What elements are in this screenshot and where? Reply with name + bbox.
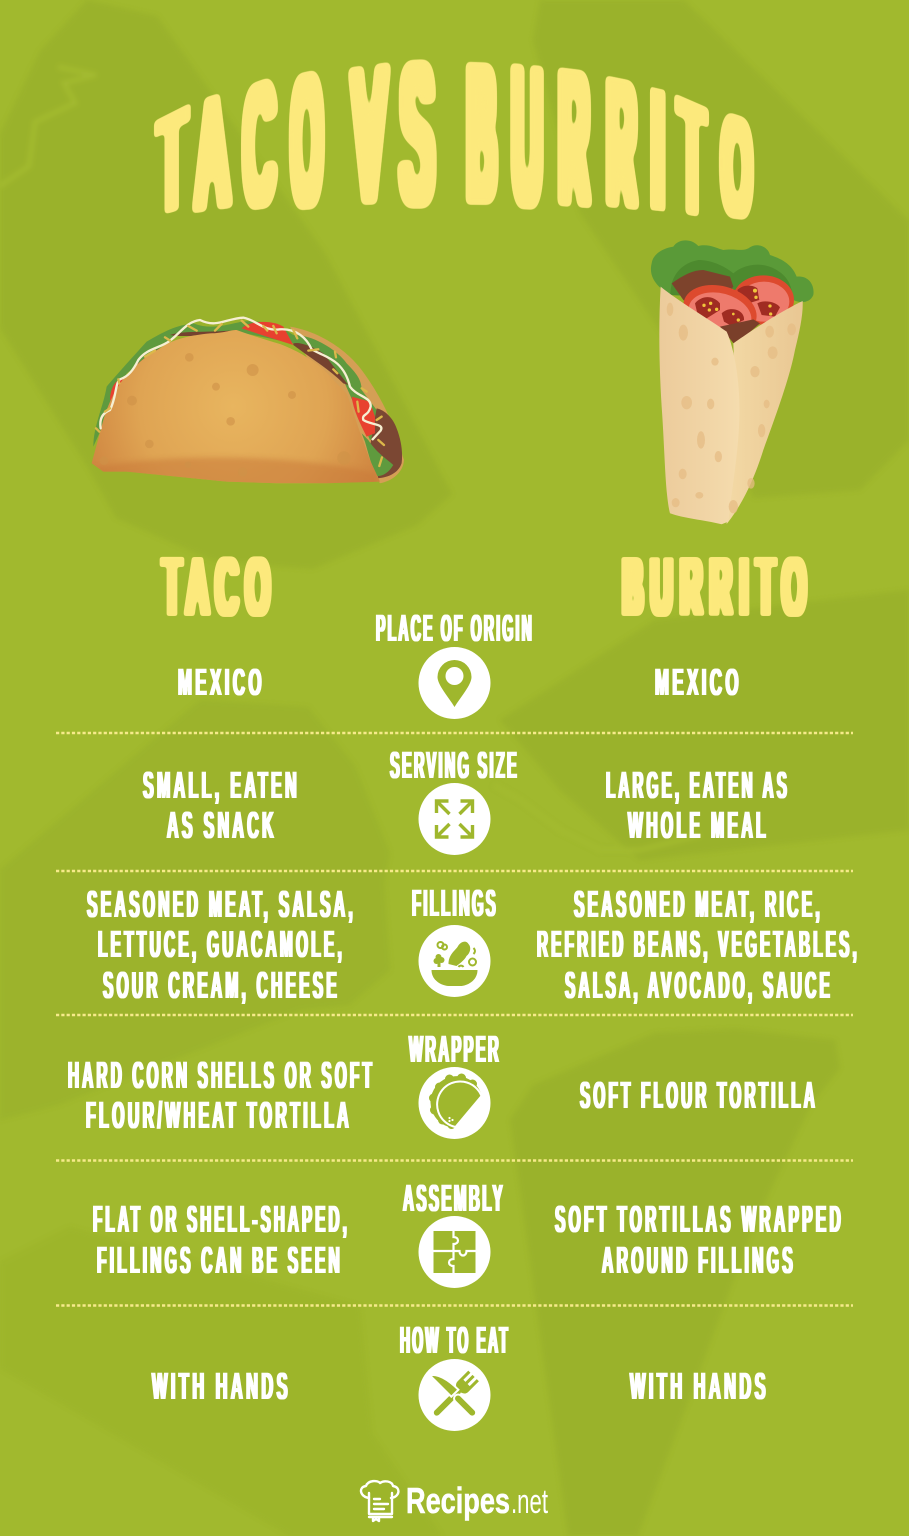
icon: taco [418, 1067, 490, 1139]
left value [87, 884, 356, 1007]
row: assembly: ASSEMBLY [403, 1178, 505, 1220]
icon: location pin [418, 647, 490, 719]
left value [143, 765, 300, 847]
title: taco vs burrito: O [730, 87, 805, 262]
row: fillings [87, 883, 860, 1007]
title: taco vs burrito: A [196, 58, 216, 239]
icon: chef hat book [361, 1481, 398, 1521]
title: taco vs burrito: T [686, 66, 762, 265]
title: taco vs burrito: B [468, 26, 499, 242]
right value [537, 884, 860, 1007]
row: how to eat: HOW TO EAT [400, 1320, 510, 1362]
row: wrapper: HARD CORN SHELLS OR SOFT [68, 1055, 375, 1097]
wordmark suffix: .net [511, 1483, 548, 1521]
text: MEXICO [655, 662, 742, 704]
title: taco vs burrito: C [242, 41, 258, 238]
title: taco vs burrito: R [560, 34, 596, 246]
row: assembly: FLAT OR SHELL-SHAPED, [93, 1199, 350, 1241]
row: place of origin: MEXICO [178, 662, 265, 704]
title: taco vs burrito [154, 25, 805, 265]
right value [555, 1199, 844, 1282]
title: taco vs burrito: T [156, 74, 172, 238]
taco illustration [90, 318, 404, 490]
row: serving size: SMALL, EATEN [143, 765, 300, 807]
row: assembly: FILLINGS CAN BE SEEN [97, 1240, 343, 1282]
title: taco vs burrito: U [513, 29, 549, 247]
row: place of origin [178, 608, 742, 719]
title: taco vs burrito: O [291, 35, 311, 241]
row: serving size [143, 745, 790, 855]
row: fillings: LETTUCE, GUACAMOLE, [98, 924, 345, 966]
icon: salad bowl [418, 925, 490, 997]
row: wrapper [68, 1029, 818, 1139]
icon: puzzle [418, 1216, 490, 1288]
row: fillings: FILLINGS [412, 883, 498, 925]
row: place of origin: PLACE OF ORIGIN [376, 608, 534, 650]
title: taco vs burrito: S [400, 25, 428, 243]
row: fillings: SEASONED MEAT, SALSA, [87, 884, 356, 926]
title: taco vs burrito: R [610, 42, 653, 248]
left value [93, 1199, 350, 1282]
title: taco vs burrito: V [352, 26, 376, 238]
row: serving size: SERVING SIZE [390, 745, 519, 787]
row: how to eat [152, 1320, 769, 1431]
logo: Recipes.net [361, 1480, 548, 1521]
row: fillings: SOUR CREAM, CHEESE [103, 965, 340, 1007]
row: wrapper: WRAPPER [409, 1029, 501, 1071]
icon: knife and fork [418, 1359, 490, 1431]
burrito illustration [651, 240, 814, 524]
row: how to eat: WITH HANDS [152, 1366, 291, 1408]
right value [606, 765, 790, 847]
row: assembly [93, 1178, 844, 1288]
wordmark: Recipes [406, 1480, 510, 1521]
left value [68, 1055, 375, 1137]
title: taco vs burrito: I [650, 57, 682, 248]
icon: expand arrows [418, 783, 490, 855]
row: wrapper: FLOUR/WHEAT TORTILLA [86, 1095, 352, 1137]
text: TACO [163, 542, 278, 631]
left value: AS SNACK [167, 805, 277, 847]
